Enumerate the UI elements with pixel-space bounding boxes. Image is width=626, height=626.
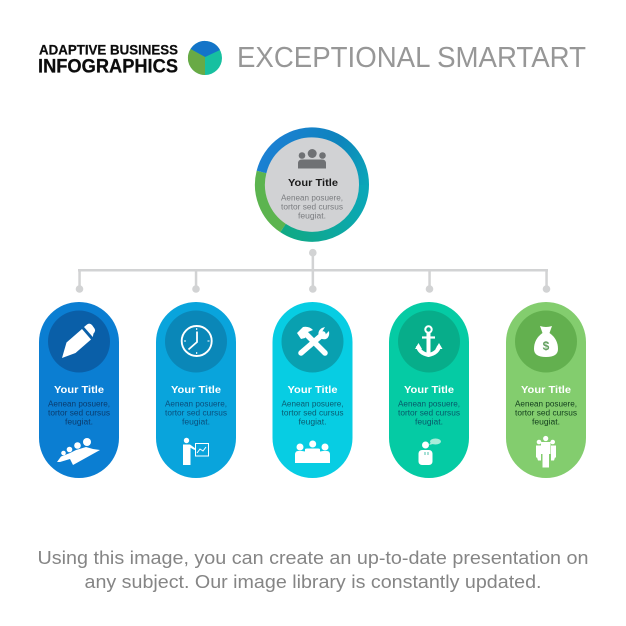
icon: clock (182, 326, 212, 356)
text: card description (398, 400, 460, 426)
icon: speaker with bubble (418, 438, 441, 465)
text: card description: tortor sed cursus (515, 408, 577, 418)
icon: crossed tools (297, 327, 329, 353)
icon: audience (57, 438, 100, 465)
heading: brand name (38, 41, 178, 78)
icon: team (536, 436, 556, 468)
text: card description: tortor sed cursus (165, 408, 227, 418)
panel: money bag card (506, 302, 586, 478)
heading: card title: Your Title (171, 384, 221, 396)
text: footer caption: any subject. Our image library is constantly updated. (84, 571, 542, 592)
heading: card title: Your Title (288, 384, 338, 396)
text: card description: tortor sed cursus (398, 408, 460, 418)
text: center description (281, 194, 343, 220)
text: card description (48, 400, 110, 426)
text: center description: tortor sed cursus (281, 202, 343, 212)
text: card description (282, 400, 344, 426)
text: card description: feugiat. (65, 418, 93, 426)
heading: card title: Your Title (404, 384, 454, 396)
text: card description: Aenean posuere, (398, 400, 460, 408)
heading: center title: Your Title (288, 177, 338, 189)
text: card description: feugiat. (532, 418, 560, 426)
icon: pencil (62, 324, 95, 358)
text: footer caption: Using this image, you can create an up-to-date presentation on (38, 547, 588, 568)
text: card description: Aenean posuere, (282, 400, 344, 408)
text: card description: feugiat. (182, 418, 210, 426)
panel: pencil card (39, 302, 119, 478)
heading: brand name: ADAPTIVE BUSINESS (39, 41, 178, 57)
text: card description: Aenean posuere, (515, 400, 577, 408)
text: card description: feugiat. (415, 418, 443, 426)
text: card description: feugiat. (298, 418, 326, 426)
heading: card title: Your Title (54, 384, 104, 396)
text: card description: Aenean posuere, (48, 400, 110, 408)
text: card description: tortor sed cursus (48, 408, 110, 418)
connector tree (76, 249, 550, 293)
heading: brand name: INFOGRAPHICS (38, 56, 178, 78)
text: card description: Aenean posuere, (165, 400, 227, 408)
icon: money bag (534, 326, 558, 357)
text: center description: Aenean posuere, (281, 194, 343, 202)
title: EXCEPTIONAL SMARTART (237, 42, 586, 74)
panel: tools card (272, 302, 352, 478)
ring segments (260, 132, 364, 237)
icon: money bag: $ (543, 339, 550, 353)
heading: card title: Your Title (521, 384, 571, 396)
icon: people group (298, 149, 326, 168)
icon: presenter (183, 438, 208, 465)
panel: clock card (156, 302, 236, 478)
text: card description (165, 400, 227, 426)
icon: brand logo circle (188, 41, 222, 75)
text: center description: feugiat. (298, 212, 326, 220)
text: footer caption (38, 547, 588, 592)
panel: anchor card (389, 302, 469, 478)
text: card description: tortor sed cursus (282, 408, 344, 418)
icon: anchor (415, 326, 442, 355)
panel: central circle (260, 132, 364, 237)
text: card description (515, 400, 577, 426)
icon: meeting (295, 440, 330, 463)
